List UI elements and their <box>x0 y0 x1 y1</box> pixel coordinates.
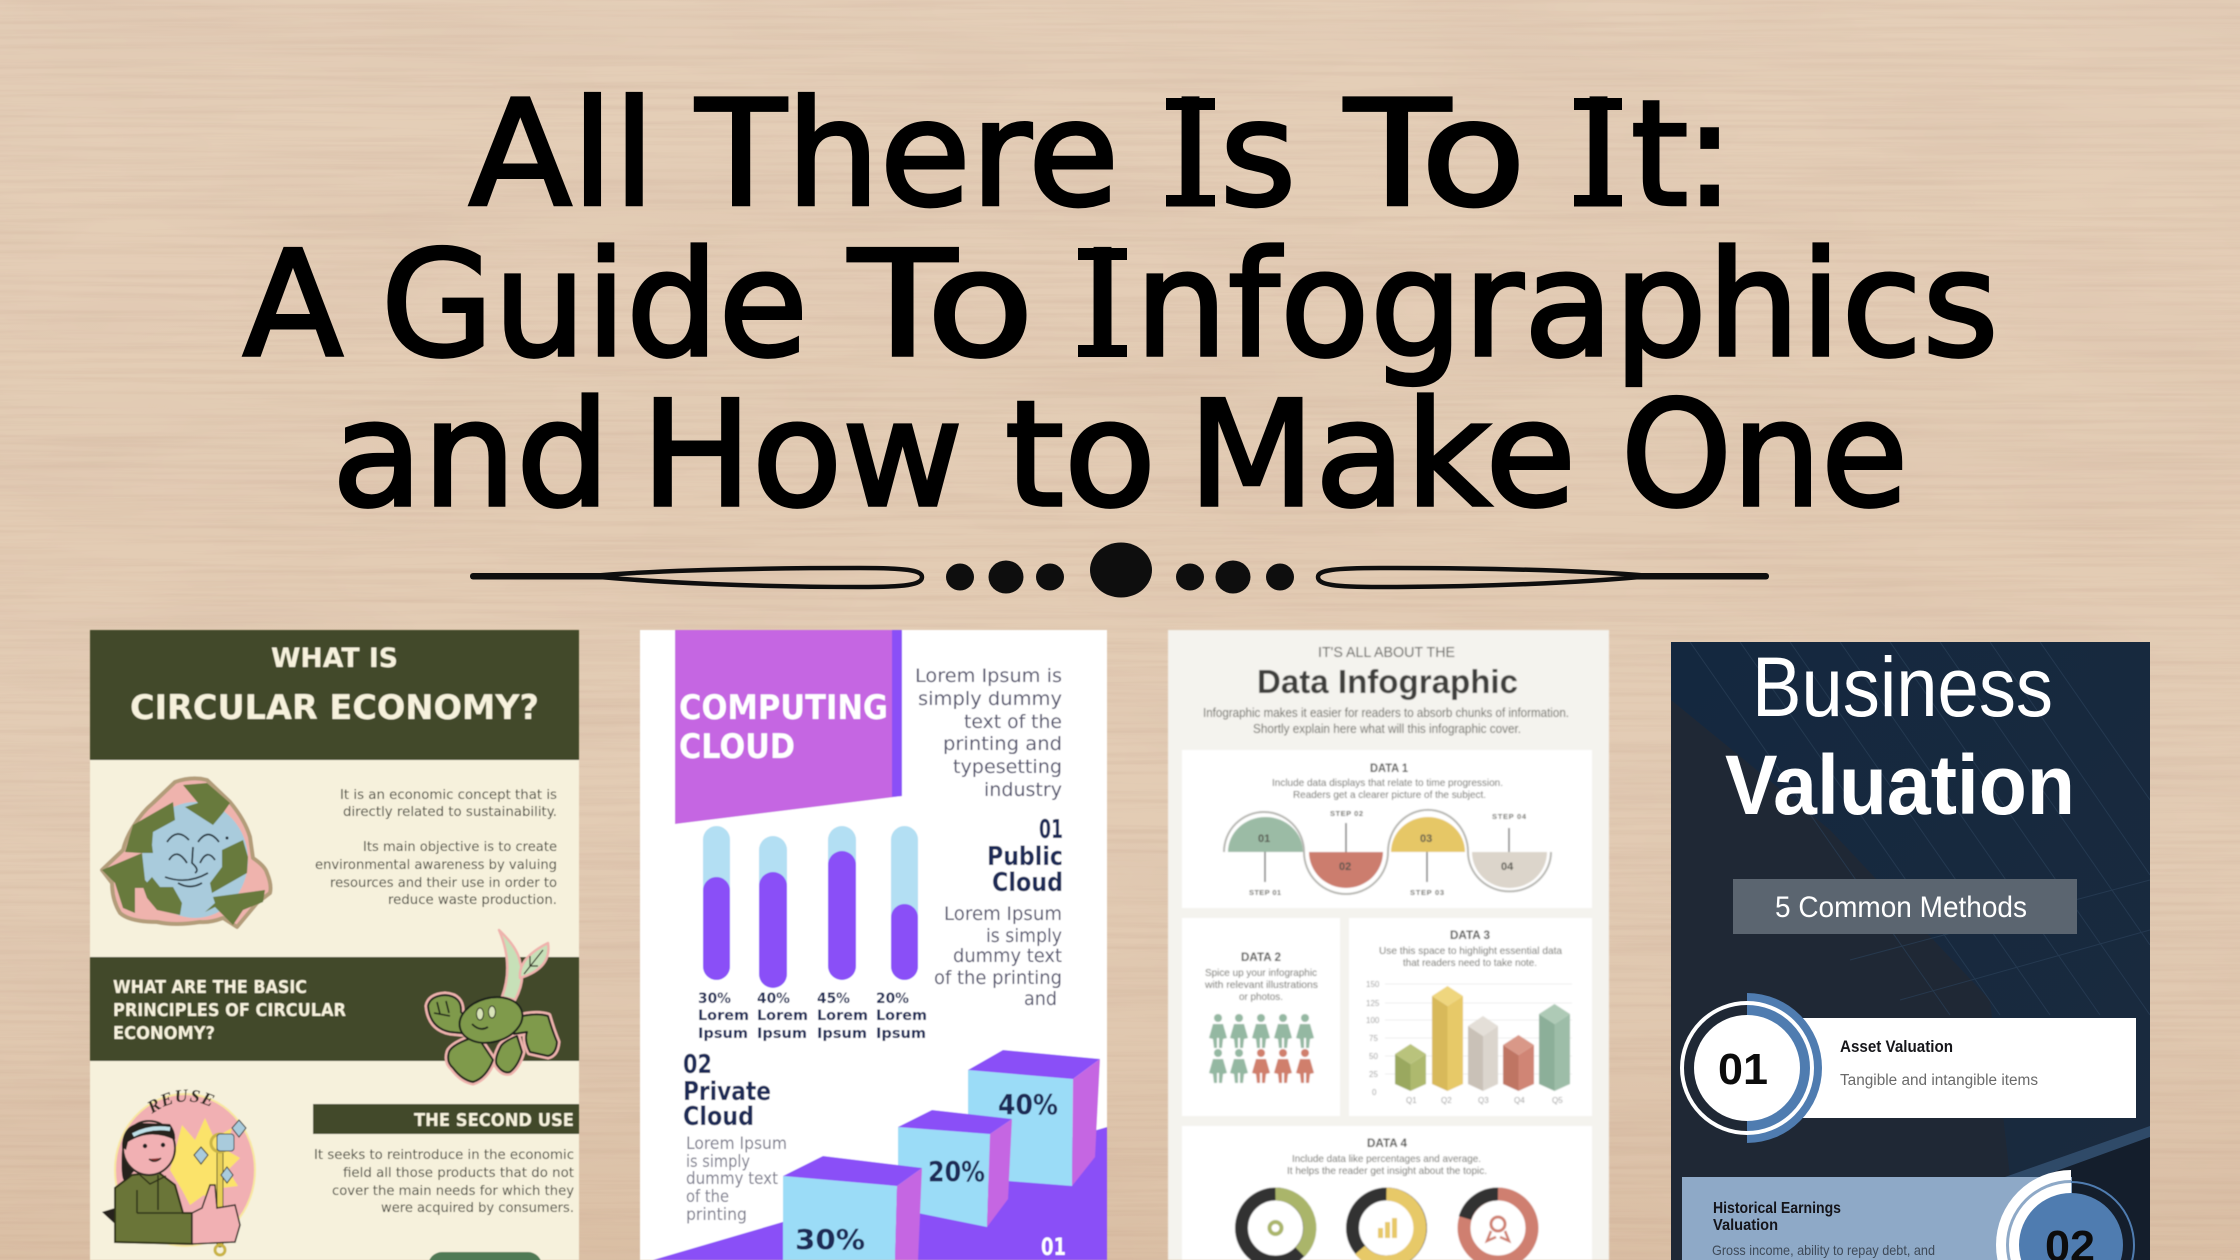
method 01: 01 <box>1718 1045 1768 1094</box>
title: Guide <box>381 220 808 390</box>
title: One <box>1621 370 1908 540</box>
bar labels: Lorem <box>876 1008 927 1024</box>
text block: public cloud: is simply <box>986 925 1062 947</box>
card: data 1 timeline: 02 <box>1339 861 1351 873</box>
title: t <box>1631 70 1688 240</box>
card: data 3 3D bar chart: 50 <box>1369 1052 1378 1061</box>
heading: Data Infographic <box>1257 663 1518 700</box>
text block: public cloud: and <box>1024 988 1057 1010</box>
card: data 1 timeline <box>1182 750 1592 908</box>
header band: CIRCULAR ECONOMY? <box>130 688 539 728</box>
ground shape <box>653 1127 1107 1260</box>
icon: reuse sticker <box>102 1088 256 1257</box>
banner: basic principles: PRINCIPLES OF CIRCULAR <box>113 1000 346 1021</box>
title: s <box>1220 70 1296 240</box>
header shape <box>675 630 902 824</box>
header band <box>90 630 579 760</box>
heading: public cloud <box>987 815 1063 898</box>
title: All <box>469 70 655 240</box>
card: data 3 3D bar chart: 75 <box>1369 1034 1378 1043</box>
text block: definition: It is an economic concept that is <box>340 788 557 803</box>
panel: business valuation <box>1671 640 2150 1260</box>
cube: 30%: 30% <box>795 1223 865 1256</box>
card: data 3 3D bar chart: Use this space to highlight essential data <box>1379 945 1562 957</box>
text block: definition <box>315 788 557 908</box>
text block: intro: printing and <box>943 733 1062 755</box>
bar labels: Ipsum <box>876 1026 926 1042</box>
banner: basic principles <box>90 957 579 1061</box>
card: data 3 3D bar chart: DATA 3 <box>1450 928 1490 942</box>
panel: circular economy <box>89 629 580 1260</box>
bar labels <box>698 991 927 1042</box>
text block: private cloud: printing <box>686 1205 747 1224</box>
card: data 1 timeline: STEP 04 <box>1492 812 1527 821</box>
banner: basic principles: WHAT ARE THE BASIC <box>113 977 307 998</box>
donut: olive <box>1242 1194 1310 1260</box>
bar labels: Ipsum <box>698 1026 748 1042</box>
text block: intro: simply dummy <box>918 688 1062 710</box>
title: Make <box>1188 370 1576 540</box>
bar labels: 45% <box>817 991 850 1007</box>
header band: WHAT IS <box>271 643 398 674</box>
panel: computing cloud <box>640 630 1107 1260</box>
title: I <box>1577 70 1620 240</box>
card: data 1 timeline: 04 <box>1501 861 1514 873</box>
card: data 3 3D bar chart: 0 <box>1372 1088 1377 1097</box>
bar labels: Lorem <box>698 1008 749 1024</box>
card: data 3 3D bar chart: Q5 <box>1552 1096 1563 1105</box>
text block: public cloud <box>934 903 1062 1010</box>
card: data 4 donuts: Include data like percentages and average. <box>1292 1153 1481 1165</box>
card: data 1 timeline: STEP 01 <box>1249 888 1281 897</box>
card: data 1 timeline: Include data displays that relate to time progression. <box>1272 777 1503 789</box>
card: data 1 timeline: STEP 02 <box>1330 809 1363 818</box>
text block: private cloud: Lorem Ipsum <box>686 1134 787 1153</box>
card: data 4 donuts <box>1182 1126 1592 1260</box>
heading <box>1726 655 2070 815</box>
bar labels: Ipsum <box>817 1026 867 1042</box>
card: data 2 people: with relevant illustrations <box>1204 979 1318 991</box>
text block: second use <box>314 1148 574 1216</box>
heading: private cloud: Cloud <box>683 1102 754 1132</box>
title: and <box>332 370 610 540</box>
bar labels: 30% <box>698 991 731 1007</box>
cube: 20% <box>898 1110 1012 1227</box>
card: data 3 3D bar chart: Q4 <box>1514 1096 1525 1105</box>
text block: second use: It seeks to reintroduce in the economic <box>314 1148 574 1163</box>
heading: Valuation <box>1725 738 2075 832</box>
text block: intro: typesetting <box>953 756 1062 778</box>
button <box>428 1252 542 1260</box>
cube: 20%: 20% <box>928 1155 985 1188</box>
card: data 4 donuts: It helps the reader get insight about the topic. <box>1287 1165 1487 1177</box>
heading: the second use: THE SECOND USE <box>414 1110 574 1131</box>
heading: private cloud <box>683 1050 771 1132</box>
heading: Shortly explain here what will this infographic cover. <box>1253 722 1521 736</box>
card: data 1 timeline: DATA 1 <box>1370 761 1408 775</box>
text block: second use: were acquired by consumers. <box>381 1201 574 1216</box>
card: data 2 people: or photos. <box>1239 991 1283 1003</box>
cube: 40%: 40% <box>998 1088 1058 1121</box>
text block: private cloud: dummy text <box>686 1169 778 1188</box>
title: nfographics <box>1135 220 1999 390</box>
bar labels: 40% <box>757 991 790 1007</box>
bar labels: Lorem <box>817 1008 868 1024</box>
method 02 <box>1682 1170 2134 1260</box>
heading: public cloud: Cloud <box>992 868 1063 898</box>
card: data 1 timeline: STEP 03 <box>1410 888 1444 897</box>
ornamental divider <box>470 542 1769 598</box>
card: data 3 3D bar chart: that readers need to take note. <box>1403 957 1537 969</box>
title: : <box>1685 70 1734 240</box>
text block: definition: environmental awareness by valuing <box>315 858 557 873</box>
card: data 2 people: Spice up your infographic <box>1205 967 1317 979</box>
title: There <box>695 70 1119 240</box>
card: data 3 3D bar chart <box>1349 918 1592 1116</box>
text block: private cloud <box>686 1134 787 1224</box>
heading: the second use <box>313 1104 579 1134</box>
icon: smiling recycling globe <box>102 778 271 927</box>
card: data 2 people: DATA 2 <box>1241 950 1281 964</box>
text block: second use: cover the main needs for which they <box>332 1184 574 1199</box>
diagonal stripe <box>2005 1126 2150 1177</box>
text block: definition: reduce waste production. <box>388 893 557 908</box>
method 02: Valuation <box>1713 1217 1778 1234</box>
card: data 3 3D bar chart: Q3 <box>1478 1096 1489 1105</box>
title <box>243 70 1999 540</box>
title: to <box>1005 370 1156 540</box>
heading: Infographic makes it easier for readers to absorb chunks of information. <box>1203 706 1569 720</box>
bar labels: Ipsum <box>757 1026 807 1042</box>
text block: intro: industry <box>984 779 1062 801</box>
card: data 2 people <box>1182 918 1340 1116</box>
title: To <box>848 220 1034 390</box>
cube: 30% <box>783 1156 922 1260</box>
card: data 4 donuts: DATA 4 <box>1367 1136 1407 1150</box>
icon: sprout mascot <box>428 930 557 1082</box>
method 01: Asset Valuation <box>1840 1038 1953 1056</box>
text block: definition: resources and their use in order to <box>330 876 557 891</box>
heading <box>1203 644 1569 736</box>
subtitle box <box>1733 879 2077 934</box>
card: data 3 3D bar chart: 125 <box>1366 999 1380 1008</box>
text block: private cloud: is simply <box>686 1152 750 1171</box>
heading: Business <box>1752 640 2053 734</box>
text block: intro: text of the <box>964 711 1062 733</box>
method 01 <box>1682 993 2136 1143</box>
bar labels: Lorem <box>757 1008 808 1024</box>
title: I <box>1169 70 1212 240</box>
heading: public cloud: 01 <box>1039 815 1063 845</box>
method 01: Tangible and intangible items <box>1840 1072 2038 1089</box>
card: data 3 3D bar chart: Q1 <box>1406 1096 1417 1105</box>
title: To <box>1344 70 1526 240</box>
title: A <box>243 220 343 390</box>
heading: public cloud: Public <box>987 842 1063 872</box>
card: data 3 3D bar chart: 25 <box>1369 1070 1378 1079</box>
heading: private cloud: 02 <box>683 1050 712 1080</box>
donut: yellow <box>1352 1194 1420 1260</box>
text block: private cloud: of the <box>686 1187 729 1206</box>
header shape: COMPUTING <box>679 688 888 728</box>
text block: intro: Lorem Ipsum is <box>915 665 1062 687</box>
text block: public cloud: Lorem Ipsum <box>944 903 1062 925</box>
card: data 3 3D bar chart: 100 <box>1366 1016 1380 1025</box>
icon: reuse sticker: REUSE <box>147 1088 216 1114</box>
title: I <box>1081 220 1125 390</box>
text block: second use: field all those products that do not <box>343 1166 574 1181</box>
text block: definition: Its main objective is to create <box>363 840 557 855</box>
text block: definition: directly related to sustainability. <box>343 805 557 820</box>
text block: intro <box>915 665 1062 801</box>
subtitle box: 5 Common Methods <box>1775 891 2027 924</box>
card: data 3 3D bar chart: Q2 <box>1441 1096 1452 1105</box>
method 02: Gross income, ability to repay debt, and <box>1712 1242 1935 1258</box>
card: data 3 3D bar chart: 150 <box>1366 980 1380 989</box>
card: data 1 timeline: 03 <box>1420 833 1432 845</box>
text block: public cloud: of the printing <box>934 967 1062 989</box>
method 02: Historical Earnings <box>1713 1200 1841 1217</box>
panel: data infographic <box>1168 630 1609 1260</box>
banner: basic principles: ECONOMY? <box>113 1023 215 1044</box>
card: data 1 timeline: 01 <box>1258 833 1270 845</box>
heading: IT'S ALL ABOUT THE <box>1318 644 1455 661</box>
bar chart: capsule bars <box>703 826 918 988</box>
header shape: CLOUD <box>679 727 795 767</box>
bar labels: 20% <box>876 991 909 1007</box>
donut: red <box>1464 1194 1532 1260</box>
heading: private cloud: Private <box>683 1077 771 1107</box>
title: How <box>641 370 963 540</box>
card: data 1 timeline: Readers get a clearer picture of the subject. <box>1293 789 1486 801</box>
text block: public cloud: dummy text <box>953 945 1062 967</box>
cube: 40% <box>968 1050 1100 1186</box>
